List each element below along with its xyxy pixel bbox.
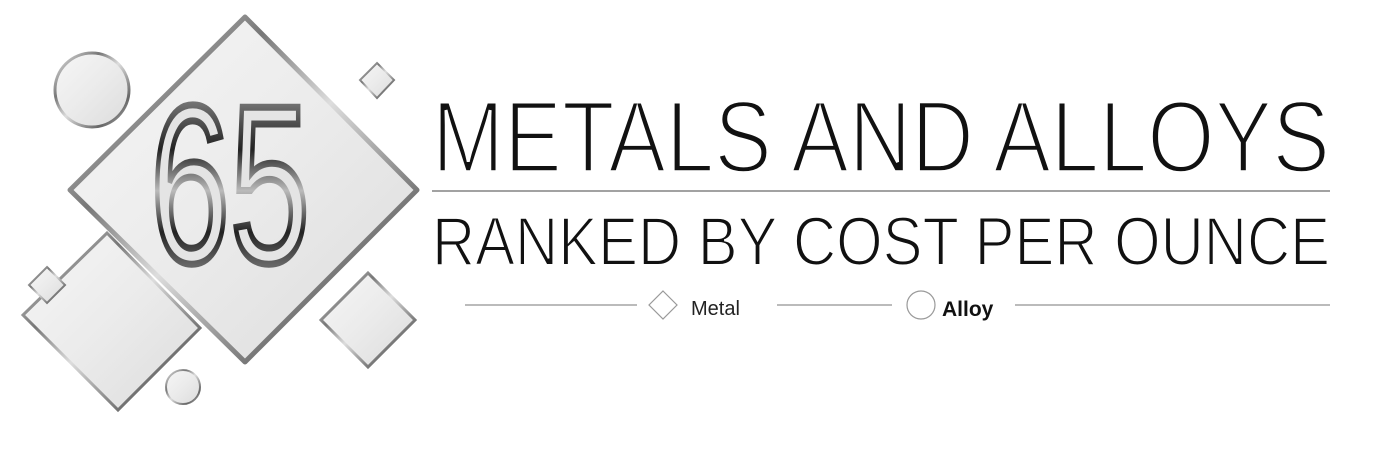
icon: alloy circle bbox=[907, 291, 935, 319]
top circle bbox=[55, 53, 129, 127]
big diamond bbox=[70, 17, 417, 362]
divider bbox=[432, 190, 1330, 192]
small diamond left bbox=[29, 267, 65, 303]
lower-left square bbox=[23, 233, 200, 410]
small circle bbox=[166, 370, 200, 404]
legend: Alloy: Alloy bbox=[942, 298, 994, 321]
logo graphic bbox=[23, 17, 417, 410]
right diamond bbox=[321, 273, 415, 367]
small diamond top right bbox=[360, 63, 394, 98]
number 65: 65 bbox=[150, 58, 310, 310]
legend bbox=[465, 291, 1330, 321]
legend: Metal: Metal bbox=[691, 298, 740, 320]
icon: metal diamond bbox=[649, 291, 677, 319]
